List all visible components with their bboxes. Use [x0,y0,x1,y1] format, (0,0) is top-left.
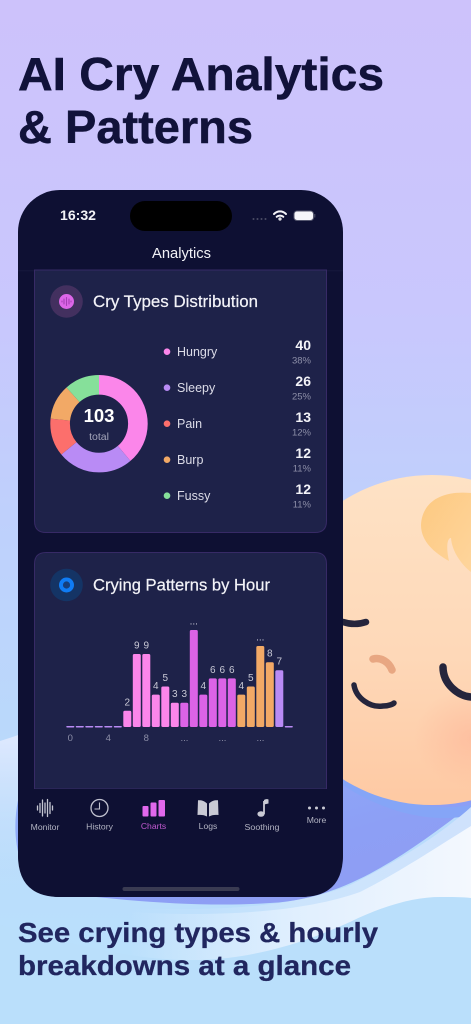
bar axis labels: 8 [144,733,149,744]
tab: charts active [141,800,166,831]
card icon [50,285,83,318]
panel: cry types distribution [34,270,326,532]
title: & Patterns [18,101,253,153]
legend: pain: 13 [295,409,311,425]
tab: charts active: Charts [141,821,166,831]
left eye [343,622,366,624]
legend: fussy: 12 [295,481,311,497]
bar axis labels: ... [219,733,226,744]
legend: sleepy: 26 [295,373,311,389]
card background [34,552,326,789]
donut total: 103 [84,405,114,426]
bar value labels: 6 [229,665,235,676]
signal dots [252,218,266,220]
bar value labels: ... [190,616,198,628]
donut total: total [89,431,109,443]
tab: monitor: Monitor [31,822,59,832]
card icon [50,569,83,601]
bar axis labels: 0 [68,733,73,744]
bar value labels: 8 [267,648,273,660]
bar value labels [125,616,283,708]
phone body [18,190,343,897]
card heading: Crying Patterns by Hour [93,576,270,594]
legend: sleepy: Sleepy [177,381,216,395]
panel: crying patterns by hour [34,552,326,789]
tab bar background [18,789,343,897]
illustration: sleeping baby [15,475,471,905]
tab: history: History [86,822,114,832]
bar value labels: 4 [201,681,207,692]
bar axis labels [68,733,264,744]
foreground waves [0,807,471,1024]
bar value labels: 7 [277,656,283,668]
legend: pain: Pain [177,417,202,431]
title: AI Cry Analytics [18,48,384,100]
wifi icon [274,211,286,220]
caption [18,917,378,981]
baby head [266,475,471,805]
bar value labels: 9 [144,640,150,652]
legend: pain [164,409,312,438]
tab: soothing [244,799,280,832]
phone [18,190,343,897]
legend: sleepy [164,373,312,402]
battery icon [294,211,315,220]
tab: more: More [307,815,327,825]
bar value labels: 6 [220,665,226,676]
donut chart [60,385,138,463]
bar value labels: 5 [248,673,254,684]
right eye [443,667,471,697]
bar value labels: ... [256,632,264,644]
legend: fussy: 11% [293,500,312,510]
bar value labels: 3 [172,689,178,700]
legend: pain: 12% [292,428,312,438]
tab: monitor [31,800,59,832]
nose [373,659,392,670]
tab: logs [198,800,218,831]
bar value labels: 3 [182,689,188,700]
screen title: Analytics [152,246,211,262]
donut total [84,405,114,443]
tab: soothing: Soothing [244,822,280,832]
legend: hungry: 40 [295,337,311,353]
card background [34,270,326,532]
legend: hungry: 38% [292,356,312,366]
tab: history [86,800,114,832]
legend: hungry: Hungry [177,345,218,359]
bar value labels: 5 [163,673,169,684]
status bar: 16:32 [60,208,96,223]
legend: burp: Burp [177,453,203,467]
bar axis labels: ... [257,733,264,744]
legend: sleepy: 25% [292,392,312,402]
bar axis labels: 4 [106,733,111,744]
bar value labels: 4 [239,681,245,692]
legend: burp: 12 [295,445,311,461]
legend: hungry [164,337,312,366]
bar chart [66,616,293,744]
baby cheek [414,688,471,788]
tab bar [18,789,343,897]
legend: burp: 11% [293,464,312,474]
mouth [354,685,394,706]
legend: fussy: Fussy [177,489,211,503]
legend: burp [164,445,312,474]
caption: See crying types & hourly [18,917,378,948]
bar value labels: 9 [134,640,140,652]
bar value labels: 6 [210,665,216,676]
caption: breakdowns at a glance [18,950,351,981]
card heading: Cry Types Distribution [93,293,258,311]
legend: fussy [164,481,312,510]
home indicator [122,887,240,891]
blanket [15,770,471,905]
status bar [60,201,315,231]
left white wave [0,728,60,905]
tab: more [307,806,327,825]
bar value labels: 4 [153,681,159,692]
hair [421,493,471,572]
tab: logs: Logs [199,821,217,831]
header divider [18,270,343,272]
bar axis labels: ... [181,733,188,744]
dynamic island [130,201,232,231]
bar value labels: 2 [125,698,131,708]
title [18,48,384,153]
